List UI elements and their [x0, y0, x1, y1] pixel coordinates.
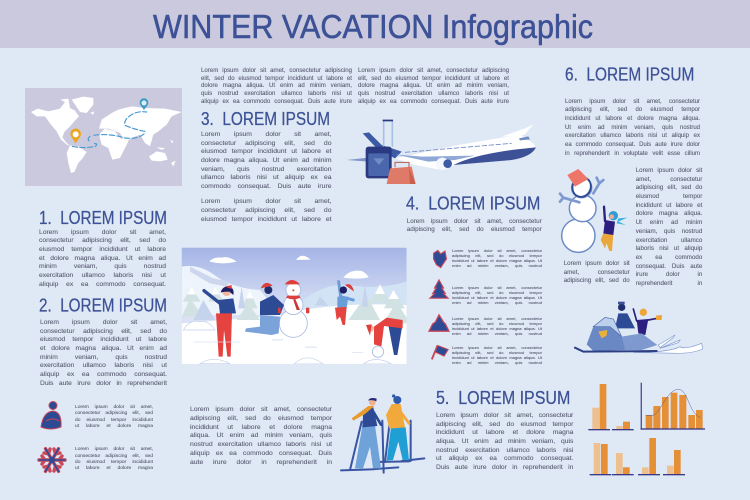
text block: beside snowman: dolore magna aliqua. [636, 210, 702, 217]
text block: bottom centre [190, 406, 332, 466]
text block 6: adipiscing elit, sed do eiusmod tempor [565, 107, 700, 113]
bar chart: bottom 2 [612, 453, 634, 475]
right skier [386, 394, 409, 461]
text block: top column 1: Lorem ipsum dolor sit amet, consectetur adipiscing [201, 67, 352, 74]
snow trail [633, 335, 703, 353]
left skier [352, 398, 381, 468]
small text: mitten: incididunt ut labore et dolore magna aliqua. Ut [452, 258, 542, 263]
text block 2: eiusmod tempor incididunt ut labore [40, 336, 167, 343]
heading 6: 6. LOREM IPSUM [565, 65, 694, 85]
bar chart: bottom 1 [590, 443, 611, 475]
text block 3b: consectetur adipiscing elit, sed do [201, 207, 332, 214]
text block: beside snowman: eiusmod tempor [636, 193, 702, 200]
kneeling man [245, 283, 284, 335]
bag [387, 162, 416, 184]
text block 2: et dolore magna aliqua. Ut enim ad [40, 345, 167, 352]
pin: destination [140, 98, 148, 110]
text block: beside snowman: reprehenderit in [636, 280, 702, 287]
text block: bottom centre: nostrud exercitation ullamco laboris nisi ut [190, 441, 332, 448]
text block 4: adipiscing elit, sed do eiusmod tempor [407, 226, 542, 233]
text block: top column 1: quis nostrud exercitation ullamco laboris nisi ut [201, 90, 352, 97]
text block: top column 2: dolore magna aliqua. Ut enim ad minim veniam, [358, 82, 509, 89]
text block: top column 1: dolore magna aliqua. Ut enim ad minim veniam, [201, 82, 352, 89]
text block: beside snowman: incididunt ut labore et [636, 202, 702, 209]
text block: below snowman [564, 260, 630, 284]
text block: beside snowman: veniam, quis nostrud [636, 228, 702, 235]
photo: building a snowman [182, 248, 406, 364]
text block: beside snowman: amet, consectetur [636, 176, 702, 183]
text block 4: Lorem ipsum dolor sit amet, consectetur [407, 218, 542, 225]
text block: top column 1 [201, 67, 352, 105]
small text: hat: ut labore et dolore magna [75, 424, 153, 429]
text block: top column 1: elit, sed do eiusmod tempor incididunt ut labore et [201, 75, 352, 82]
heading 2: 2. LOREM IPSUM [39, 296, 167, 316]
text block: below snowman: Lorem ipsum dolor sit [564, 260, 630, 267]
text block 6: incididunt ut labore et dolore magna aliqua. [565, 116, 700, 122]
child passenger [633, 309, 662, 335]
engine [436, 158, 452, 170]
text block: beside snowman: consequat. Duis aute [636, 263, 702, 270]
bar chart: bottom 4 [663, 450, 685, 475]
small text: snowflake: consectetur adipiscing elit, sed [75, 454, 153, 459]
text block 6: ea commodo consequat. Duis aute irure dolor [565, 142, 700, 148]
text block: beside snowman: ex ea commodo [636, 254, 702, 261]
small text: hat: do eiusmod tempor incididunt [75, 418, 153, 423]
small text: mountain: adipiscing elit, sed do eiusmod tempor [452, 321, 542, 326]
text block 6 [565, 98, 700, 157]
tail [347, 132, 402, 162]
text block 3a: dolore magna aliqua. Ut enim ad minim [201, 157, 332, 164]
text block 5: ut aliquip ex ea commodo consequat. [436, 455, 573, 462]
icon: flag [431, 344, 449, 360]
child [601, 207, 627, 251]
small text: hat: Lorem ipsum dolor sit amet, [75, 405, 153, 410]
text block 5: incididunt ut labore et dolore magna [436, 429, 573, 436]
text block 1: exercitation ullamco laboris nisi ut [39, 272, 166, 279]
text block 5: Duis aute irure dolor in reprehenderit in [436, 464, 573, 471]
small text: mountain [452, 316, 542, 336]
small text: mitten: adipiscing elit, sed do eiusmod tempor [452, 253, 542, 258]
text block 1 [39, 229, 166, 288]
text block: beside snowman: exercitation ullamco [636, 237, 702, 244]
fuselage [395, 124, 536, 170]
small text: flag: adipiscing elit, sed do eiusmod tempor [452, 350, 542, 355]
text block 2: Duis aute irure dolor in reprehenderit [40, 380, 167, 387]
small text: hat [75, 404, 153, 429]
text block 1: Lorem ipsum dolor sit amet, [39, 229, 166, 236]
text block 3a: veniam, quis nostrud exercitation [201, 166, 332, 173]
small text: flag [452, 345, 542, 365]
small text: mountain: enim ad minim veniam, quis nostrud [452, 331, 542, 336]
icon: mountain [428, 314, 450, 332]
text block: beside snowman [636, 167, 702, 287]
small text: mountain: Lorem ipsum dolor sit amet, consectetur [452, 316, 542, 321]
text block 1: et dolore magna aliqua. Ut enim ad [39, 255, 166, 262]
pin: origin [70, 128, 81, 143]
small text: mountain: incididunt ut labore et dolore magna aliqua. Ut [452, 326, 542, 331]
small text: flag: enim ad minim veniam, quis nostrud [452, 360, 542, 365]
text block: top column 2: quis nostrud exercitation ullamco laboris nisi ut [358, 90, 509, 97]
small text: fir tree: incididunt ut labore et dolore magna aliqua. Ut [452, 295, 542, 300]
text block 3a: ullamco laboris nisi ut aliquip ex ea [201, 174, 332, 181]
text block 3b: Lorem ipsum dolor sit amet, [201, 198, 332, 205]
small text: fir tree: enim ad minim veniam, quis nostrud [452, 300, 542, 305]
text block: below snowman: adipiscing elit, sed do [564, 277, 630, 284]
text block 5 [436, 412, 574, 471]
woman [204, 285, 236, 357]
text block: top column 1: aliquip ex ea commodo consequat. Duis aute irure [201, 98, 352, 105]
small text: snowflake: Lorem ipsum dolor sit amet, [75, 447, 153, 452]
snowman [279, 283, 307, 337]
heading 4: 4. LOREM IPSUM [406, 194, 540, 214]
text block 1: consectetur adipiscing elit, sed do [39, 237, 166, 244]
small text: fir tree: adipiscing elit, sed do eiusmod tempor [452, 290, 542, 295]
suitcase [366, 120, 393, 178]
icon: winter hat [40, 401, 62, 430]
small text: mitten: enim ad minim veniam, quis nostrud [452, 263, 542, 268]
bar charts [588, 382, 705, 476]
icon: mitten [433, 250, 447, 268]
illustration: two skiers [340, 394, 426, 474]
text block 2 [40, 319, 167, 387]
text block 4 [407, 218, 542, 233]
world map with route [25, 88, 182, 186]
text block 5: adipiscing elit, sed do eiusmod tempor [436, 421, 573, 428]
bar chart: top middle [612, 422, 634, 430]
text block 6: Lorem ipsum dolor sit amet, consectetur [565, 98, 700, 104]
text block: below snowman: amet, consectetur [564, 269, 630, 276]
illustration: snowmobile [574, 302, 703, 354]
text block 1: minim veniam, quis nostrud [39, 263, 166, 270]
text block 3b [201, 198, 332, 223]
small text: mitten [452, 248, 542, 268]
text block 2: aliquip ex ea commodo consequat. [40, 371, 167, 378]
icon: fir tree [428, 278, 450, 299]
heading 1: 1. LOREM IPSUM [39, 208, 167, 228]
small text: snowflake: ut labore et dolore magna [75, 466, 153, 471]
text block 2: minim veniam, quis nostrud [40, 354, 167, 361]
text block 3a: commodo consequat. Duis aute irure [201, 183, 332, 190]
text block 3a: eiusmod tempor incididunt ut labore et [201, 148, 332, 155]
small text: fir tree [452, 285, 542, 305]
illustration: airplane and luggage [347, 120, 536, 184]
text block: bottom centre: adipiscing elit, sed do eiusmod tempor [190, 415, 332, 422]
ski [575, 348, 657, 352]
text block: bottom centre: aliquip ex ea commodo consequat. Duis [190, 450, 332, 457]
text block: beside snowman: irure dolor in [636, 271, 702, 278]
text block 3a [201, 131, 332, 190]
text block: top column 2: Lorem ipsum dolor sit amet, consectetur adipiscing [358, 67, 509, 74]
text block 3b: eiusmod tempor incididunt ut labore et [201, 216, 332, 223]
text block 2: exercitation ullamco laboris nisi ut [40, 362, 167, 369]
text block 5: aliqua. Ut enim ad minim veniam, quis [436, 438, 573, 445]
bar chart: top left [588, 384, 610, 430]
text block: beside snowman: Lorem ipsum dolor sit [636, 167, 702, 174]
vehicle body [587, 317, 657, 351]
text block 5: nostrud exercitation ullamco laboris nisi [436, 447, 573, 454]
text block: bottom centre: aliqua. Ut enim ad minim veniam, quis [190, 432, 332, 439]
bar chart: bottom 3 [638, 438, 660, 475]
small text: snowflake [75, 446, 153, 471]
text block 5: Lorem ipsum dolor sit amet, consectetur [436, 412, 573, 419]
text block 3a: consectetur adipiscing elit, sed do [201, 140, 332, 147]
text block: bottom centre: Lorem ipsum dolor sit amet, consectetur [190, 406, 332, 413]
text block 3a: Lorem ipsum dolor sit amet, [201, 131, 332, 138]
text block: bottom centre: aute irure dolor in reprehenderit in [190, 458, 332, 466]
illustration: snowman and child [558, 169, 628, 254]
icon: snowflake [37, 446, 67, 474]
text block: beside snowman: laboris nisi ut aliquip [636, 245, 702, 252]
text block 1: eiusmod tempor incididunt ut labore [39, 246, 166, 253]
text block 6: in reprehenderit in voluptate velit esse cillum [565, 151, 700, 157]
text block 2: consectetur adipiscing elit, sed do [40, 328, 167, 335]
heading 3: 3. LOREM IPSUM [201, 109, 330, 129]
trees [182, 288, 406, 324]
small text: hat: consectetur adipiscing elit, sed [75, 411, 153, 416]
boy [335, 282, 354, 325]
text block: top column 2 [358, 67, 509, 105]
heading 5: 5. LOREM IPSUM [436, 388, 570, 408]
text block 1: aliquip ex ea commodo consequat. [39, 281, 166, 288]
text block: top column 2: aliquip ex ea commodo consequat. Duis aute irure [358, 98, 509, 105]
histogram with curve [641, 383, 705, 430]
small text: mitten: Lorem ipsum dolor sit amet, consectetur [452, 248, 542, 253]
small text: flag: incididunt ut labore et dolore magna aliqua. Ut [452, 355, 542, 360]
header band with title: WINTER VACATION Infographic [153, 9, 593, 46]
text block 2: Lorem ipsum dolor sit amet, [40, 319, 167, 326]
bending person [366, 318, 403, 357]
header band with title [0, 0, 750, 48]
small text: snowflake: do eiusmod tempor incididunt [75, 460, 153, 465]
small text: fir tree: Lorem ipsum dolor sit amet, consectetur [452, 285, 542, 290]
text block: bottom centre: incididunt ut labore et dolore magna [190, 424, 332, 431]
driver [615, 302, 635, 328]
text block: top column 2: elit, sed do eiusmod tempor incididunt ut labore et [358, 75, 509, 82]
text block 6: exercitation ullamco laboris nisi ut aliquip ex [565, 133, 700, 139]
small text: flag: Lorem ipsum dolor sit amet, consectetur [452, 345, 542, 350]
text block: beside snowman: Ut enim ad minim [636, 219, 702, 226]
text block: beside snowman: adipiscing elit, sed do [636, 184, 702, 191]
text block 6: Ut enim ad minim veniam, quis nostrud [565, 125, 700, 131]
